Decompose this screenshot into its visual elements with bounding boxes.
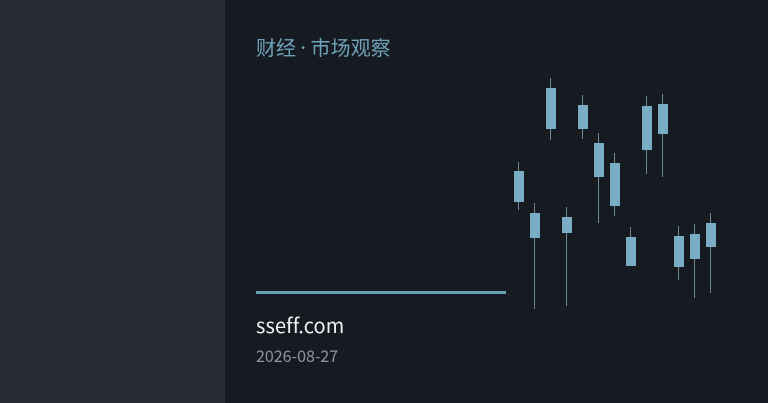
heading: category title: 财经 · 市场观察 xyxy=(256,32,391,61)
panel: left sidebar xyxy=(0,0,225,403)
text: site name: sseff.com xyxy=(256,310,344,339)
text: date: 2026-08-27 xyxy=(256,343,338,367)
accent rule xyxy=(256,291,506,294)
